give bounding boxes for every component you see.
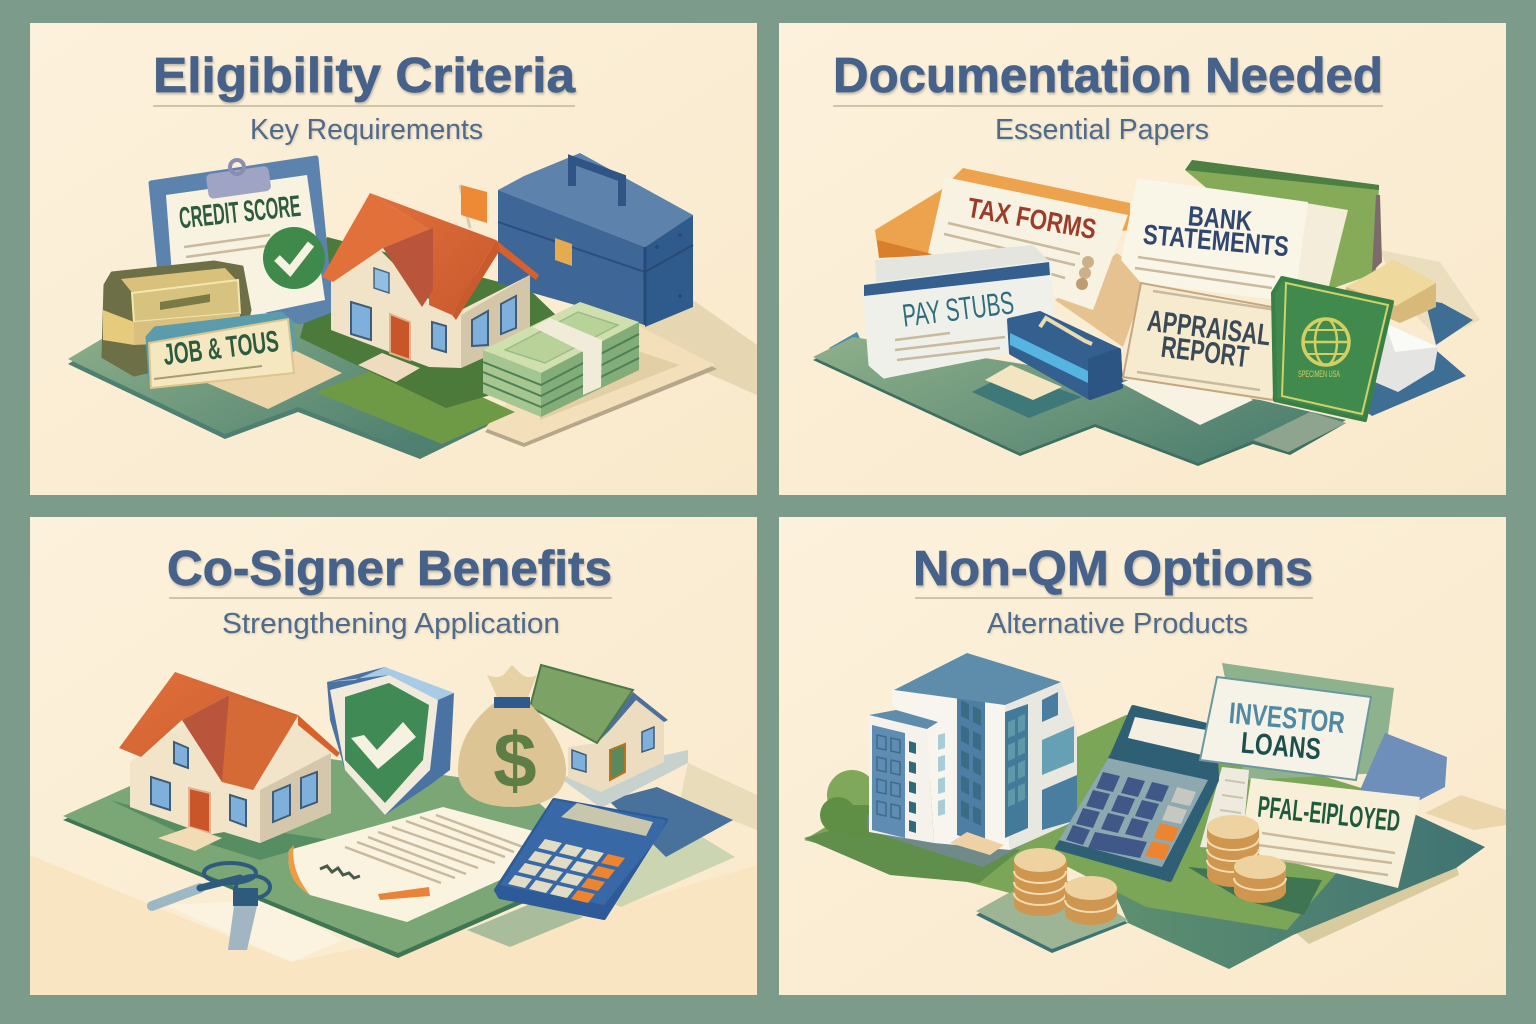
icon: passport xyxy=(1273,278,1392,420)
label: credit score: CREDIT SCORE xyxy=(178,190,302,235)
icon: job card xyxy=(147,313,294,388)
icon: orange pen xyxy=(378,887,430,900)
icon: coin stack left xyxy=(1014,848,1117,925)
icon: keys xyxy=(152,863,270,950)
icon: briefcase xyxy=(498,153,693,327)
subheading: alternative products: Alternative Products xyxy=(987,608,1248,640)
panel: eligibility criteria xyxy=(30,23,757,495)
icon: small house xyxy=(530,665,688,808)
floor platforms xyxy=(804,715,1506,969)
icon: green check badge xyxy=(263,227,325,289)
label: loans: LOANS xyxy=(1240,727,1322,766)
document: bank statements xyxy=(1121,160,1382,300)
subheading: key requirements: Key Requirements xyxy=(250,114,483,146)
panel: documentation needed xyxy=(779,23,1506,495)
heading: co-signer benefits: Co-Signer Benefits xyxy=(167,542,612,596)
windows xyxy=(877,735,900,819)
signature xyxy=(320,866,360,878)
floor platforms xyxy=(68,237,757,459)
label: investor: INVESTOR xyxy=(1228,697,1346,740)
label: tax forms: TAX FORMS xyxy=(965,192,1099,245)
label: appraisal: APPRAISAL xyxy=(1145,305,1272,352)
document: green folder and blue stack xyxy=(1200,663,1447,850)
heading: documentation needed: Documentation Needed xyxy=(833,49,1383,103)
icon: shield with check xyxy=(327,667,454,815)
label: self employed: PFAL-EIPLOYED xyxy=(1256,791,1402,838)
panel: non-qm options xyxy=(779,517,1506,995)
document: tax forms xyxy=(928,177,1128,310)
document: tan sheet xyxy=(1055,253,1148,347)
subheading: essential papers: Essential Papers xyxy=(995,114,1209,146)
icon: orange folder xyxy=(875,168,1130,258)
label: bank: BANK xyxy=(1187,200,1253,237)
document: contract xyxy=(288,807,537,922)
label: dollar sign: $ xyxy=(493,716,537,804)
floor platforms xyxy=(813,250,1480,466)
icon: calculator xyxy=(496,800,666,918)
document: appraisal report xyxy=(1123,283,1288,400)
icon: small case xyxy=(985,313,1121,400)
label: statements: STATEMENTS xyxy=(1142,219,1290,262)
icon: calculator xyxy=(1057,707,1217,880)
icon: bushes xyxy=(820,770,877,837)
icon: cash stack xyxy=(483,302,639,417)
icon: house xyxy=(322,193,539,382)
label: job & tous: JOB & TOUS xyxy=(161,325,281,372)
heading: eligibility criteria: Eligibility Criteria xyxy=(153,49,576,103)
sign: investor loans xyxy=(1200,677,1371,780)
panel: co-signer benefits xyxy=(30,517,757,995)
icon: house xyxy=(119,672,340,851)
icon: tan paper stack xyxy=(1346,260,1436,323)
card: self employed xyxy=(1240,778,1420,888)
label: report: REPORT xyxy=(1159,331,1251,374)
floor platforms xyxy=(30,759,757,995)
subheading: strengthening application: Strengthening Application xyxy=(222,608,560,640)
paper under appraisal xyxy=(1121,360,1253,425)
document: pay stubs xyxy=(864,245,1055,377)
icon: wallet xyxy=(103,262,250,375)
icon: clipboard with credit score xyxy=(151,158,331,322)
icon: white paper stack xyxy=(1370,323,1438,392)
icon: coin stack right xyxy=(1207,815,1286,903)
icon: money bag xyxy=(458,665,566,807)
label: passport line: SPECIMEN USA xyxy=(1298,369,1340,379)
heading: non-qm options: Non-QM Options xyxy=(913,542,1313,596)
label: pay stubs: PAY STUBS xyxy=(900,284,1016,334)
icon: flag xyxy=(460,185,487,228)
icon: apartment building xyxy=(867,653,1077,867)
